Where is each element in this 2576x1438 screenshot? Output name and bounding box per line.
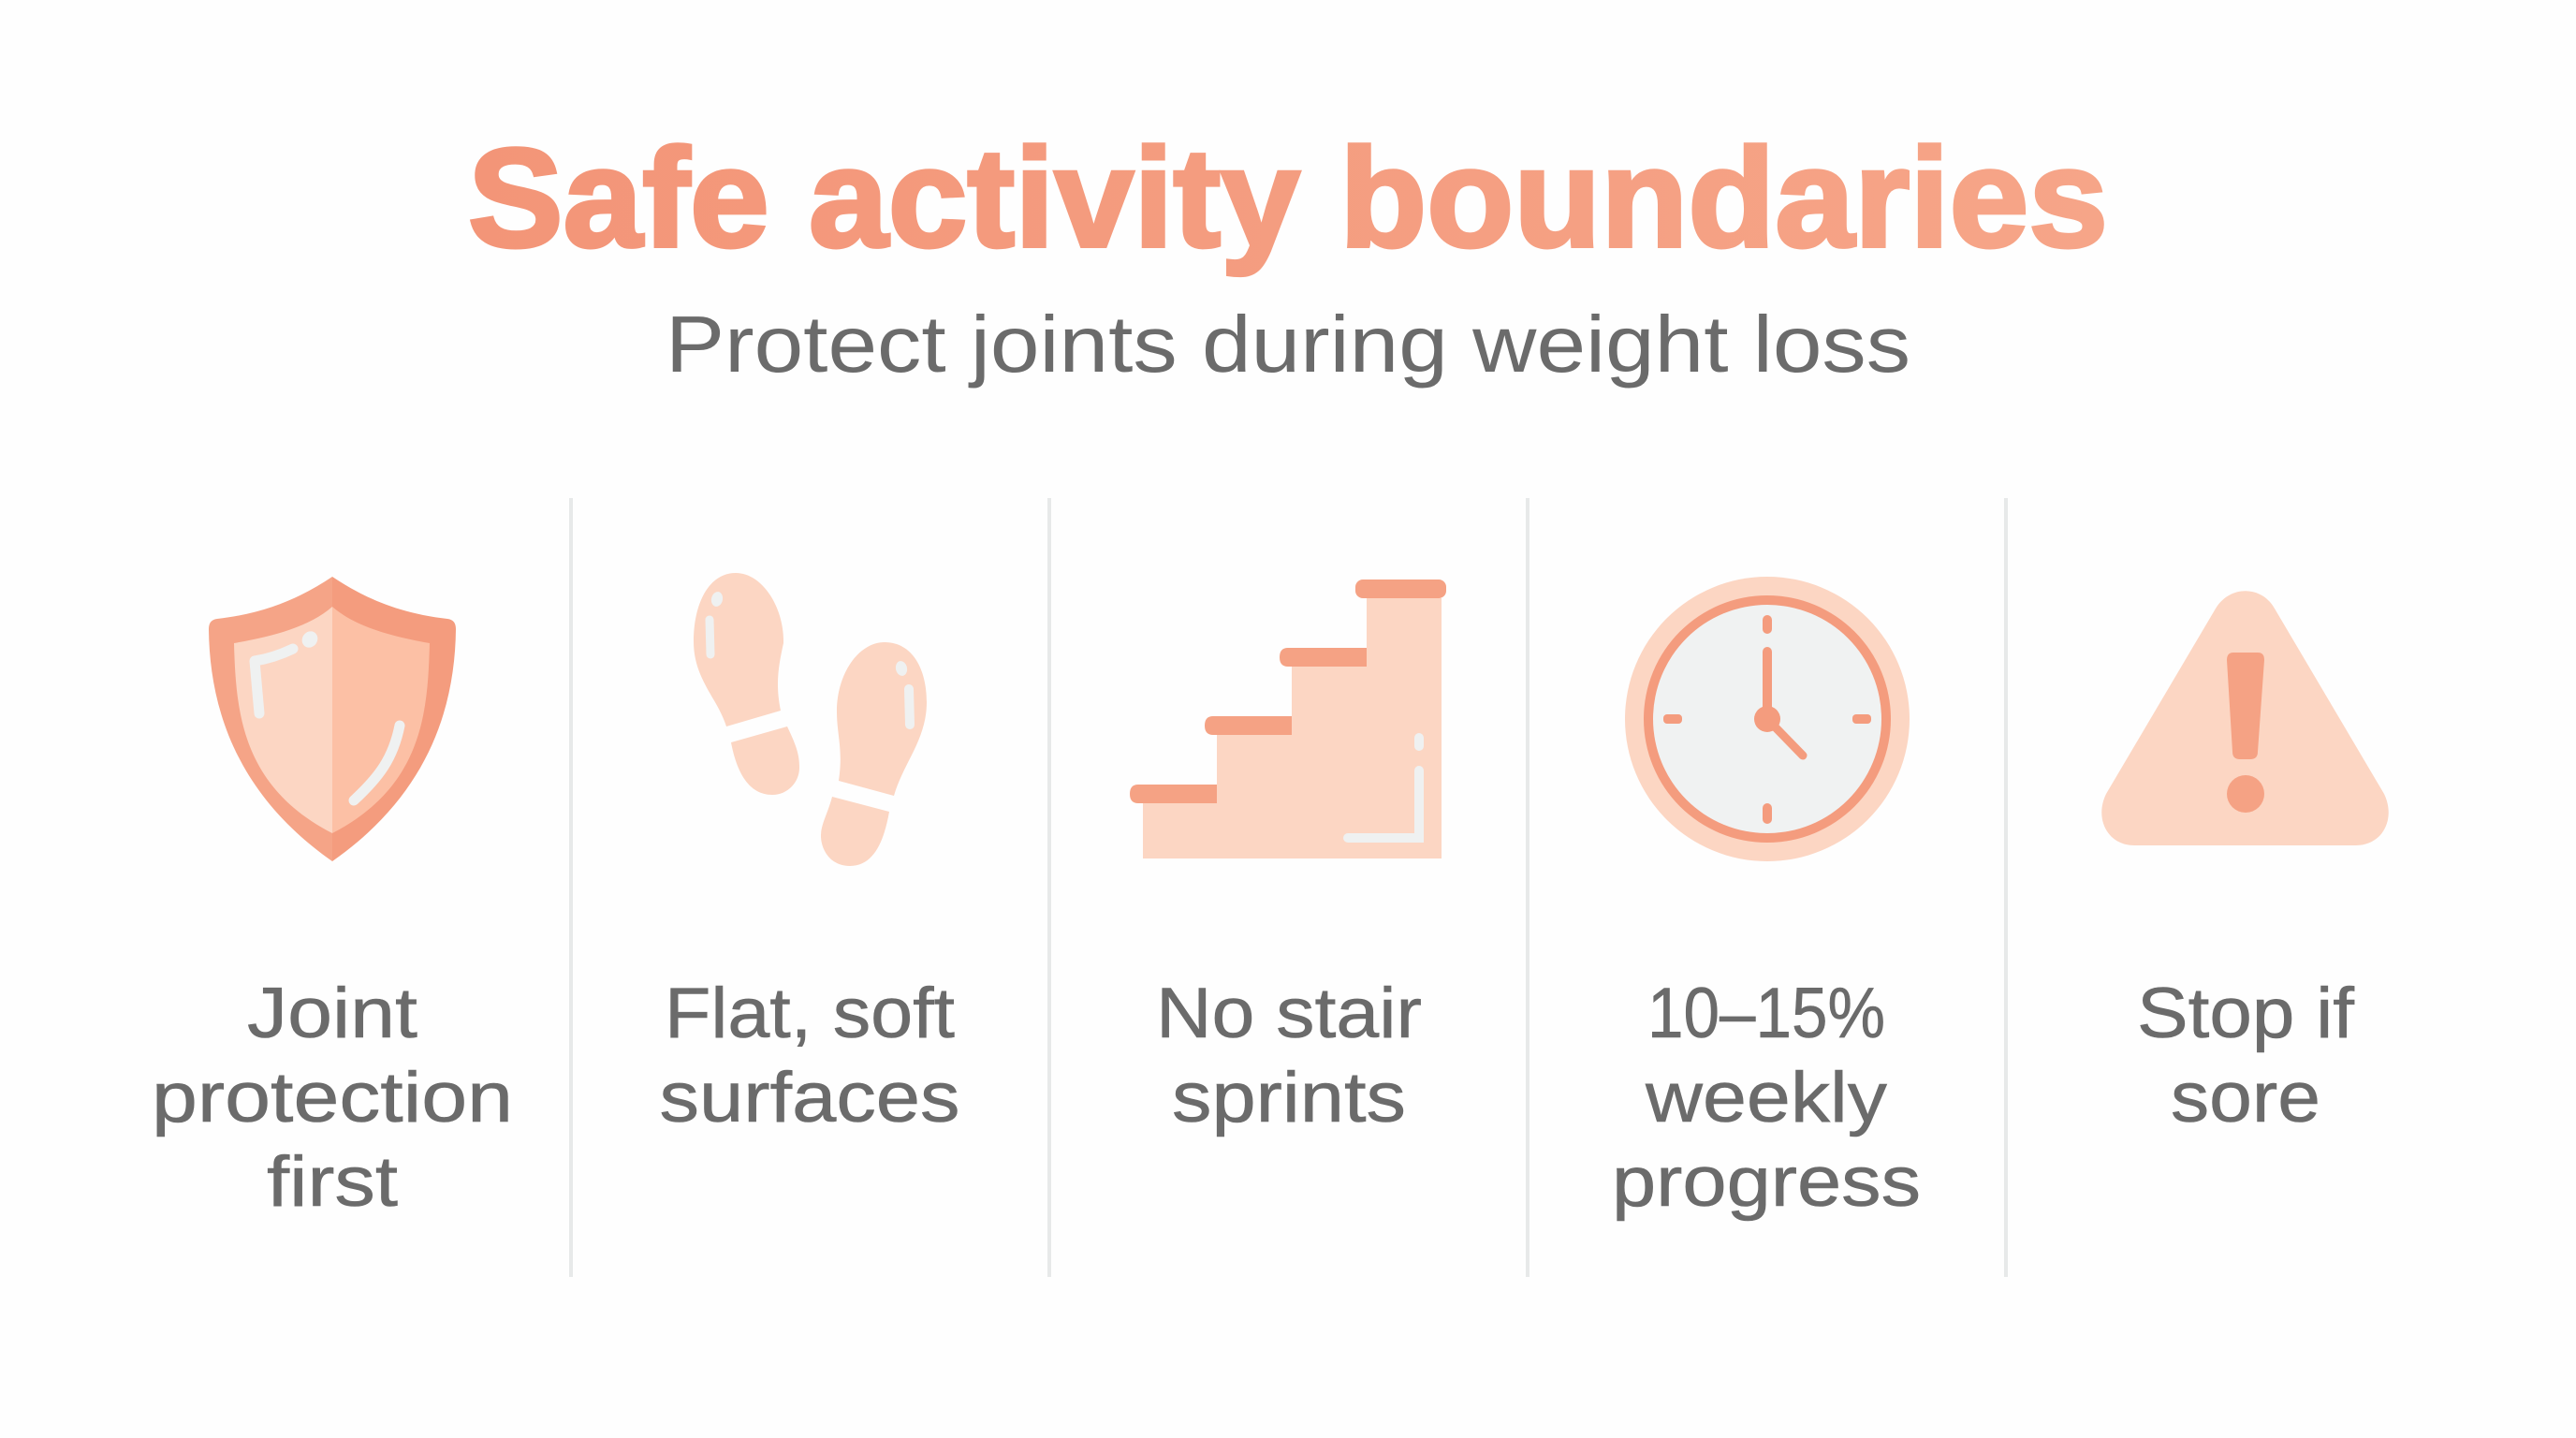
icon: stairs: [1130, 580, 1446, 858]
icon: warning triangle: [2101, 591, 2389, 845]
label: flat soft surfaces: surfaces: [659, 1058, 960, 1137]
label: no stair sprints: No stair: [1156, 974, 1422, 1053]
label: joint protection first: first: [267, 1142, 398, 1222]
panel: flat soft surfaces: [659, 573, 960, 1137]
panel: weekly progress: [1612, 577, 1921, 1222]
label: no stair sprints: sprints: [1172, 1058, 1406, 1137]
label: stop if sore: Stop if: [2137, 974, 2355, 1053]
label: joint protection first: Joint: [247, 974, 417, 1053]
label: flat soft surfaces: Flat, soft: [665, 974, 955, 1053]
title: Safe activity boundaries: [468, 119, 2108, 276]
icon: shield: [209, 577, 456, 861]
panel: stop if sore: [2101, 591, 2389, 1137]
label: 10–15% weekly progress: 10–15%: [1647, 974, 1885, 1053]
icon: footprints: [694, 573, 927, 866]
label: joint protection first: protection: [152, 1058, 513, 1137]
icon: clock: [1625, 577, 1910, 861]
panel: no stair sprints: [1130, 580, 1446, 1137]
label: stop if sore: sore: [2171, 1058, 2320, 1137]
panel: joint protection: [152, 577, 513, 1222]
subtitle: Protect joints during weight loss: [666, 301, 1910, 389]
label: 10–15% weekly progress: weekly: [1645, 1058, 1887, 1137]
label: 10–15% weekly progress: progress: [1612, 1142, 1921, 1222]
